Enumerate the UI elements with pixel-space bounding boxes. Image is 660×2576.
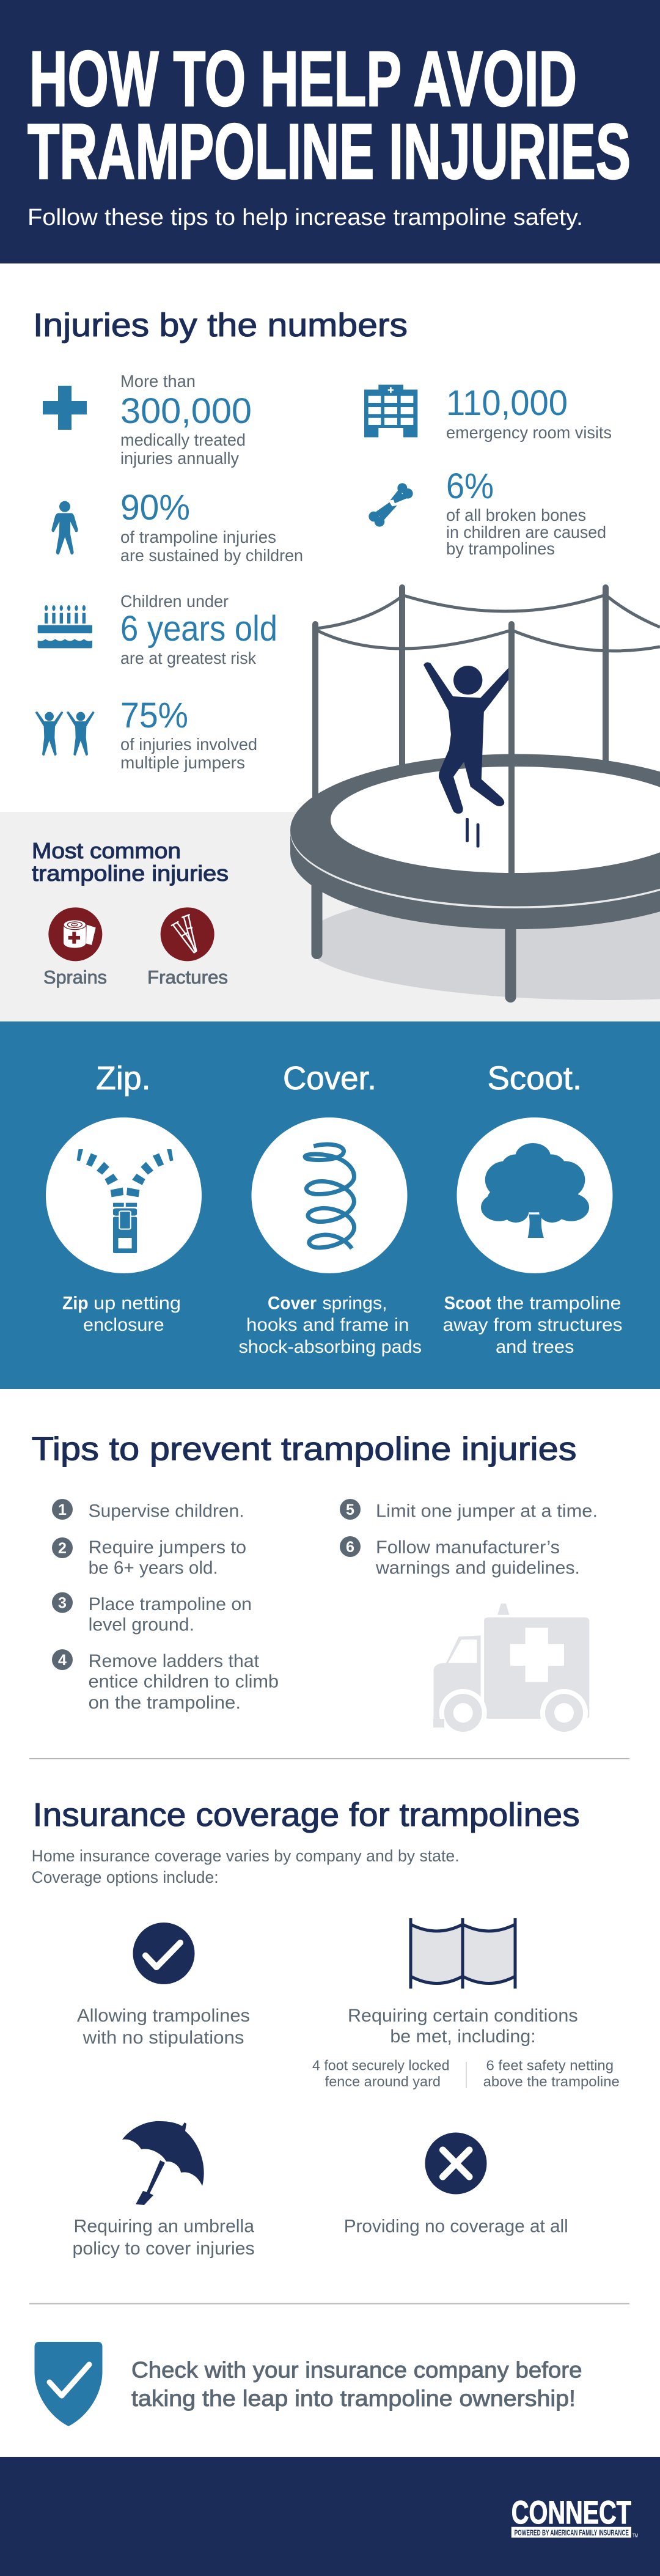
text: allowing trampolines: with no stipulations: [82, 2028, 244, 2048]
text: fence condition: [312, 2058, 450, 2089]
text: fence condition: fence around yard: [325, 2074, 441, 2089]
text: cover tip: [238, 1294, 422, 1357]
text: zip tip: [62, 1294, 181, 1335]
heading: injuries by the numbers: Injuries by the numbers: [33, 307, 408, 344]
stat: 6%: by trampolines: [446, 539, 555, 558]
tip 4: 4: [58, 1652, 67, 1669]
tip 4: Remove ladders that: [89, 1651, 260, 1671]
icon: crutches: [161, 907, 215, 961]
stat: 90%: 90%: [120, 488, 190, 528]
tip 6: [340, 1536, 580, 1578]
panel: header: [0, 0, 660, 263]
tip 6: Follow manufacturer’s: [376, 1537, 560, 1558]
heading: zip: Zip.: [96, 1060, 151, 1097]
panel: grey injuries background: [0, 812, 660, 1021]
stat: 300,000: [120, 372, 252, 468]
stat: 6 years old: Children under: [120, 592, 229, 611]
stat: 6 years old: are at greatest risk: [120, 649, 257, 668]
text: netting condition: 6 feet safety netting: [486, 2058, 614, 2074]
stat: 110,000: 110,000: [446, 383, 568, 423]
icon: hospital: [364, 385, 417, 437]
heading: most common trampoline injuries: Most common: [32, 838, 181, 863]
tip 3: level ground.: [89, 1615, 194, 1635]
text: insurance intro: Home insurance coverage varies by company and by state.: [32, 1847, 460, 1865]
tip 5: Limit one jumper at a time.: [376, 1501, 598, 1522]
text: zip tip: enclosure: [83, 1315, 164, 1335]
callout: check with your insurance company: taking the leap into trampoline ownership!: [131, 2386, 576, 2411]
stat: 75%: of injuries involved: [120, 735, 257, 754]
stat: 6 years old: [120, 592, 277, 668]
tip 1: 1: [58, 1501, 67, 1518]
icon: broken bone: [369, 483, 413, 527]
icon: child: [51, 501, 78, 554]
tip 3: [52, 1592, 252, 1635]
stat: 6%: in children are caused: [446, 523, 606, 542]
stat: 300,000: More than: [120, 372, 196, 391]
stat: 90%: [120, 488, 303, 565]
text: insurance intro: [32, 1847, 460, 1886]
tip 4: entice children to climb: [89, 1671, 279, 1691]
icon: spring: [252, 1117, 407, 1273]
text: cover tip: shock-absorbing pads: [238, 1337, 422, 1357]
text: requiring conditions: be met, including:: [390, 2026, 536, 2047]
stat: 6%: [446, 466, 606, 558]
logo: connect: TM: [632, 2533, 638, 2538]
text: insurance intro: Coverage options include:: [32, 1868, 219, 1886]
title: [28, 35, 631, 196]
icon: umbrella: [122, 2121, 204, 2205]
text: no coverage: Providing no coverage at all: [344, 2217, 568, 2237]
text: netting condition: above the trampoline: [483, 2074, 620, 2089]
text: umbrella policy: [72, 2217, 255, 2259]
tip 3: 3: [58, 1595, 67, 1612]
icon: two jumpers: [35, 712, 95, 756]
tip 3: Place trampoline on: [89, 1594, 252, 1614]
heading: tips: Tips to prevent trampoline injuries: [32, 1431, 577, 1468]
text: allowing trampolines: [77, 2006, 250, 2048]
icon: check circle: [133, 1923, 194, 1984]
text: cover tip: springs,: [323, 1294, 387, 1314]
panel: zip cover scoot: [0, 1021, 660, 1389]
stat: 110,000: emergency room visits: [446, 423, 612, 442]
stat: 75%: multiple jumpers: [120, 753, 245, 772]
tip 2: Require jumpers to: [89, 1537, 246, 1558]
labels: sprains and fractures: Sprains: [43, 966, 107, 988]
icon: safety fence: [411, 1918, 515, 1989]
heading: scoot: Scoot.: [488, 1060, 582, 1097]
icon: x circle: [425, 2132, 486, 2195]
tip 2: be 6+ years old.: [89, 1558, 218, 1578]
text: cover tip: hooks and frame in: [246, 1315, 409, 1335]
labels: sprains and fractures: Fractures: [147, 966, 228, 988]
icon: tree: [457, 1117, 612, 1273]
icon: shield with check: [34, 2342, 103, 2426]
heading: most common trampoline injuries: [32, 838, 229, 886]
tip 1: Supervise children.: [89, 1501, 244, 1522]
subtitle: Follow these tips to help increase trampoline safety.: [28, 205, 583, 230]
stat: 6%: of all broken bones: [446, 506, 586, 524]
text: scoot tip: Scoot: [444, 1294, 491, 1314]
callout: check with your insurance company: [131, 2358, 582, 2411]
heading: most common trampoline injuries: trampoline injuries: [32, 861, 229, 886]
stat: 75%: [120, 696, 257, 772]
tip 5: 5: [346, 1501, 354, 1518]
text: netting condition: [483, 2058, 620, 2089]
text: umbrella policy: Requiring an umbrella: [73, 2217, 254, 2237]
text: zip tip: up netting: [94, 1294, 181, 1314]
tip 2: 2: [58, 1540, 67, 1557]
heading: insurance coverage: Insurance coverage for trampolines: [33, 1797, 580, 1833]
stat: 300,000: 300,000: [120, 391, 252, 431]
labels: sprains and fractures: [43, 966, 228, 988]
text: fence condition: 4 foot securely locked: [312, 2058, 450, 2074]
icon: ambulance: [433, 1603, 589, 1737]
text: scoot tip: the trampoline: [497, 1294, 621, 1314]
tip 6: warnings and guidelines.: [375, 1558, 580, 1578]
stat: 300,000: medically treated: [120, 430, 246, 449]
stat: 90%: are sustained by children: [120, 546, 303, 565]
tip 6: 6: [346, 1539, 354, 1556]
icon: medical cross: [43, 386, 87, 430]
tip 4: [52, 1649, 279, 1713]
stat: 6 years old: 6 years old: [120, 609, 277, 649]
callout: check with your insurance company: Check with your insurance company before: [131, 2358, 582, 2383]
text: requiring conditions: [348, 2006, 578, 2047]
stat: 110,000: [446, 383, 612, 442]
stat: 90%: of trampoline injuries: [120, 528, 276, 546]
icon: zipper: [46, 1117, 202, 1273]
text: requiring conditions: Requiring certain conditions: [348, 2006, 578, 2026]
text: cover tip: Cover: [268, 1294, 317, 1314]
text: scoot tip: away from structures: [442, 1315, 622, 1335]
stat: 300,000: injuries annually: [120, 449, 239, 468]
text: zip tip: Zip: [62, 1294, 89, 1314]
text: scoot tip: [442, 1294, 622, 1357]
stat: 75%: 75%: [120, 696, 188, 735]
tip 2: [52, 1537, 246, 1578]
text: scoot tip: and trees: [496, 1337, 574, 1357]
panel: footer: [0, 2457, 660, 2576]
tip 4: on the trampoline.: [89, 1693, 241, 1713]
stat: 6%: 6%: [446, 466, 494, 506]
heading: cover: Cover.: [283, 1060, 376, 1097]
icon: birthday cake: [38, 605, 92, 648]
text: umbrella policy: policy to cover injuries: [72, 2239, 255, 2259]
text: allowing trampolines: Allowing trampolines: [77, 2006, 250, 2026]
icon: bandage roll: [48, 907, 102, 961]
jumper figure: [424, 662, 509, 848]
illustration: trampoline with jumper: [290, 584, 660, 1003]
